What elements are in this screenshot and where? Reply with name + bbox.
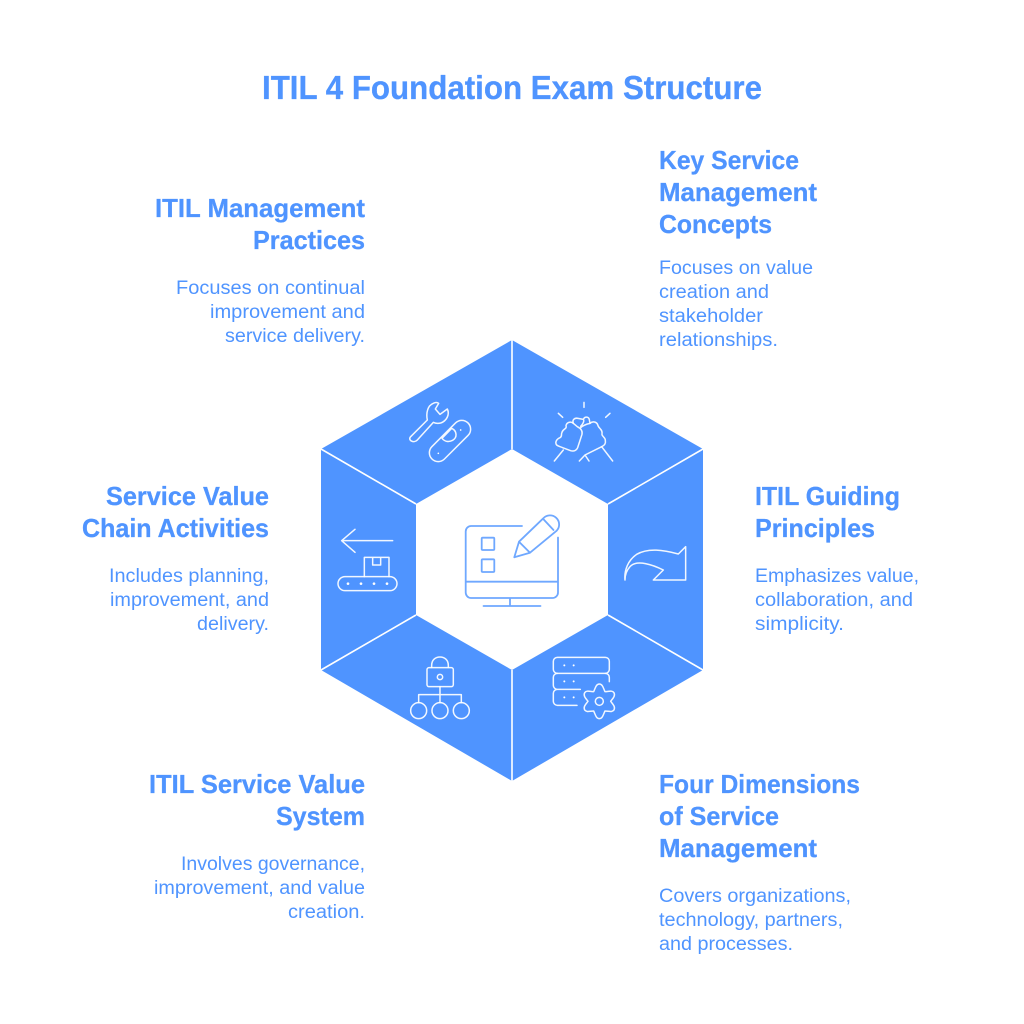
icon: wrench and plaster [410, 403, 474, 465]
heading [149, 769, 365, 831]
description: simplicity. [755, 614, 844, 635]
description [176, 278, 365, 347]
description: service delivery. [225, 326, 365, 347]
heading: Management [659, 177, 817, 207]
description: creation and [659, 282, 769, 303]
panel: hexagon diagram [321, 339, 703, 782]
description [109, 566, 269, 635]
description: improvement, and value [154, 878, 365, 899]
icon: server rack with gear [553, 657, 614, 719]
description: collaboration, and [755, 590, 913, 611]
heading [755, 481, 900, 543]
heading: Management [659, 833, 817, 863]
hexagon ring [321, 340, 703, 781]
heading [659, 769, 860, 863]
description [154, 854, 365, 923]
description: Focuses on continual [176, 278, 365, 299]
heading: Four Dimensions [659, 769, 860, 799]
heading: ITIL Guiding [755, 481, 900, 511]
description: delivery. [197, 614, 269, 635]
description: improvement, and [110, 590, 269, 611]
description: and processes. [659, 934, 793, 955]
description: improvement and [210, 302, 365, 323]
description: relationships. [659, 330, 778, 351]
icon: padlock hierarchy [411, 657, 469, 719]
text block: ITIL Service Value System [149, 769, 365, 923]
description: stakeholder [659, 306, 764, 327]
heading [82, 481, 269, 543]
heading [659, 145, 817, 239]
description [755, 566, 919, 635]
text block: Four Dimensions of Service Management [659, 769, 860, 955]
heading: ITIL Service Value [149, 769, 365, 799]
heading: Practices [253, 225, 365, 255]
description [659, 258, 813, 351]
description: Covers organizations, [659, 886, 851, 907]
heading: Chain Activities [82, 513, 269, 543]
description [659, 886, 851, 955]
heading [155, 193, 365, 255]
text block: Service Value Chain Activities [82, 481, 269, 635]
text block: Key Service Management Concepts [659, 145, 817, 351]
icon: conveyor belt with arrow [338, 529, 397, 591]
heading: of Service [659, 801, 779, 831]
description: technology, partners, [659, 910, 843, 931]
description: Involves governance, [181, 854, 365, 875]
description: Emphasizes value, [755, 566, 919, 587]
icon: monitor with checklist and pencil [466, 515, 559, 606]
description: creation. [288, 902, 365, 923]
heading: ITIL Management [155, 193, 365, 223]
heading: Concepts [659, 209, 772, 239]
text block: ITIL Management Practices [155, 193, 365, 347]
heading: Service Value [106, 481, 269, 511]
description: Includes planning, [109, 566, 269, 587]
description: Focuses on value [659, 258, 813, 279]
heading: Key Service [659, 145, 799, 175]
icon: curved arrow [625, 547, 686, 580]
title: ITIL 4 Foundation Exam Structure [262, 69, 762, 106]
icon: handshake [554, 402, 613, 461]
heading: Principles [755, 513, 875, 543]
heading: System [276, 801, 365, 831]
text block: ITIL Guiding Principles [755, 481, 919, 635]
